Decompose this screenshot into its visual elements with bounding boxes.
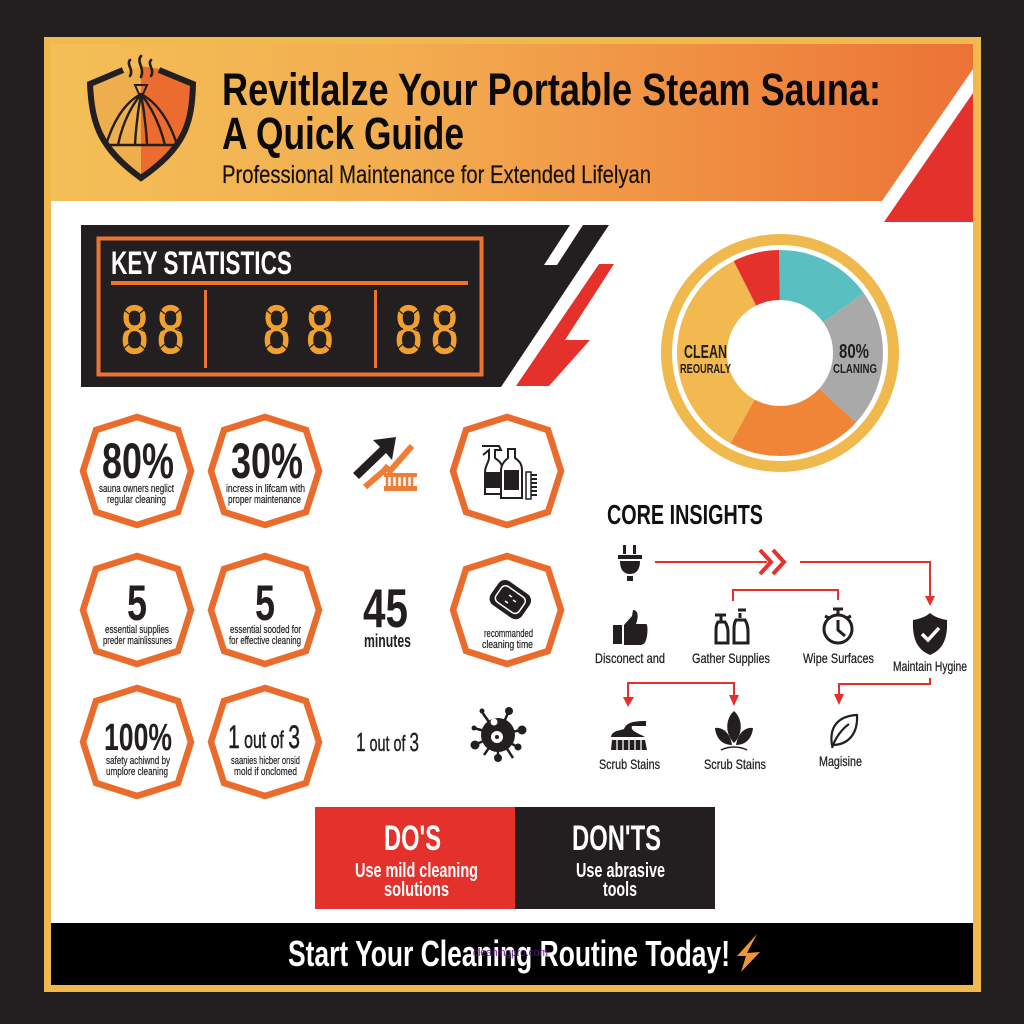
stat: 1 out of 3 mold: mold if onclomed — [234, 766, 297, 778]
digit display 2: 88 — [263, 291, 333, 368]
panel: don'ts — [515, 807, 715, 909]
stat: 5 supplies: preder mainlissunes — [103, 635, 172, 647]
stat: 1 out of 3 mold — [211, 688, 319, 796]
stat: 100% — [83, 688, 191, 796]
stat: 5 needed: essential sooded for — [230, 624, 301, 636]
stat: 5 supplies: 5 — [127, 575, 147, 631]
label: clean regularly: CLEAN — [684, 342, 727, 362]
icon: mold spore — [470, 707, 526, 762]
stat: 5 supplies: essential supplies — [105, 624, 169, 636]
stat: 100%: 100% — [104, 717, 172, 759]
stat: 80%: regular cleaning — [107, 494, 166, 506]
label: clean regularly — [680, 342, 731, 376]
icon: stopwatch — [824, 609, 852, 643]
label: 80% cleaning: 80% — [839, 341, 869, 363]
stat: 1 out of 3: 1 out of 3 — [356, 727, 419, 757]
icon: scrub brush — [611, 721, 647, 750]
watermark: cleaningpro.com — [473, 947, 548, 959]
heading: core insights: CORE INSIGHTS — [607, 499, 763, 530]
stat: 1 out of 3 mold: 1 out of 3 — [228, 719, 300, 755]
title: Revitlalze Your Portable Steam Sauna: — [222, 64, 881, 115]
flow arrows — [628, 550, 930, 700]
stat: 5 supplies — [83, 556, 191, 664]
stat: 30% — [211, 417, 319, 525]
icon: red lightning slash — [516, 264, 614, 386]
arrowheads — [623, 596, 935, 707]
icon: red corner triangle — [884, 93, 973, 222]
panel: don'ts: tools — [603, 879, 637, 901]
panel: header banner — [51, 44, 973, 222]
panel: core insights: Disconect and — [595, 650, 665, 666]
panel: do's — [315, 807, 515, 909]
stat: 80%: 80% — [102, 433, 174, 489]
icon: sauna shield logo — [90, 56, 194, 178]
stat: 45 minutes: minutes — [364, 631, 411, 651]
stat: 30%: proper maintenance — [228, 494, 301, 506]
title — [222, 64, 881, 159]
panel: do's: Use mild cleaning — [355, 860, 478, 882]
heading: key statistics: KEY STATISTICS — [111, 245, 292, 281]
footer call to action: Start Your Cleaning Routine Today! — [288, 933, 730, 974]
stat: 5 needed: 5 — [255, 575, 275, 631]
chart: donut — [666, 240, 894, 466]
icon: plug — [618, 545, 642, 581]
stat: 80% — [83, 417, 191, 525]
panel: core insights: Wipe Surfaces — [803, 650, 874, 666]
panel: do's: DO'S — [384, 819, 441, 858]
icon: arrow and brush — [353, 437, 417, 491]
icon: sponge in octagon: cleaning time — [482, 639, 533, 651]
panel: don'ts: DON'TS — [572, 819, 661, 858]
panel: core insights: Scrub Stains — [704, 756, 766, 772]
label: 80% cleaning — [833, 341, 877, 376]
stat: 30%: 30% — [231, 433, 303, 489]
label: clean regularly: REOURALY — [680, 361, 731, 376]
stat: 80%: sauna owners neglict — [99, 483, 174, 495]
icon: thumbs up — [613, 610, 648, 645]
stat: 1 out of 3 mold: saanies hicber onsid — [231, 755, 300, 767]
stat: 100%: umplore cleaning — [106, 766, 168, 778]
label: 80% cleaning: CLANING — [833, 361, 877, 376]
stat: 45 minutes — [363, 577, 411, 651]
panel: core insights: Scrub Stains — [599, 756, 660, 772]
panel: key statistics — [81, 225, 614, 387]
panel: core insights: Gather Supplies — [692, 650, 770, 666]
stat: 5 needed: for effective cleaning — [229, 635, 301, 647]
icon: hygiene shield — [913, 613, 947, 655]
icon: lightning bolt — [737, 934, 760, 972]
stat: 5 needed — [211, 556, 319, 664]
icon: sponge in octagon — [453, 556, 561, 664]
digit display 3: 88 — [395, 291, 458, 368]
subtitle: Professional Maintenance for Extended Lifelyan — [222, 161, 651, 189]
stat: 30%: incress in lifcam with — [226, 483, 305, 495]
digit display 1: 88 — [121, 291, 184, 368]
panel: core insights — [595, 499, 967, 772]
panel: core insights: Maintain Hygine — [893, 658, 967, 674]
stat: 100%: safety achiwnd by — [106, 755, 170, 767]
panel: don'ts: Use abrasive — [576, 860, 665, 882]
icon: lotus leaves — [715, 711, 753, 750]
panel: core insights: Magisine — [819, 753, 862, 769]
panel: do's: solutions — [384, 879, 449, 901]
icon: leaf — [831, 715, 857, 748]
stat: 45 minutes: 45 — [363, 577, 408, 639]
icon: supply bottles — [715, 610, 748, 643]
icon: sponge in octagon: recommanded — [484, 628, 533, 640]
icon: supplies in octagon — [453, 417, 561, 525]
footer call to action — [51, 923, 973, 985]
title: A Quick Guide — [222, 108, 464, 159]
